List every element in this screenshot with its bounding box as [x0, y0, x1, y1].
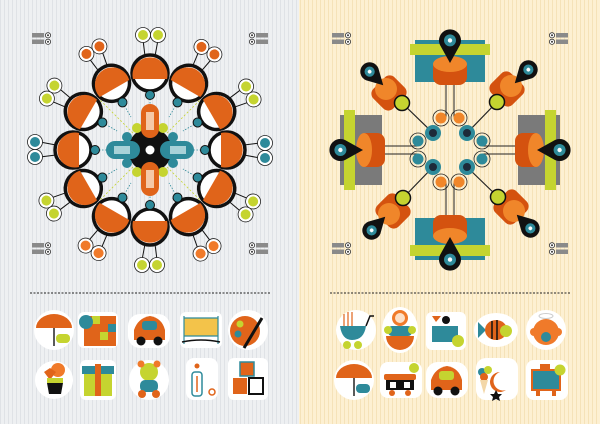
icon: thermometer and pacifier — [186, 358, 218, 400]
icon: stroller — [336, 310, 376, 350]
icon: train wagon — [380, 362, 422, 398]
icon: quilt — [78, 312, 118, 348]
icons: left panel — [34, 310, 268, 400]
divider left — [30, 292, 270, 294]
icon: car — [426, 362, 468, 398]
icons: right panel — [334, 307, 568, 401]
divider right — [330, 292, 570, 294]
legend markers: right panel — [332, 33, 568, 254]
icon: baby face — [526, 310, 566, 350]
icon: fish — [474, 313, 518, 347]
diagram: right radial network — [329, 29, 571, 271]
icon: crib — [180, 312, 222, 348]
diagram: left radial wheel — [28, 28, 272, 272]
icon: ice cream and moon — [476, 358, 518, 401]
icon: car — [128, 314, 170, 348]
icon: palette — [228, 310, 268, 350]
legend markers: left panel — [32, 33, 268, 254]
icon: chalkboard — [526, 360, 568, 400]
icon: umbrella — [34, 310, 74, 350]
icon: doll — [382, 307, 418, 353]
panel: left background — [0, 0, 299, 424]
icon: gift — [80, 360, 116, 400]
panel: right background — [299, 0, 600, 424]
icon: teddy bear — [129, 360, 169, 400]
icon: toy box — [426, 312, 466, 350]
icon: umbrella and cloud — [334, 360, 374, 400]
icon: flower pot — [35, 361, 73, 399]
icon: blocks — [228, 358, 268, 400]
